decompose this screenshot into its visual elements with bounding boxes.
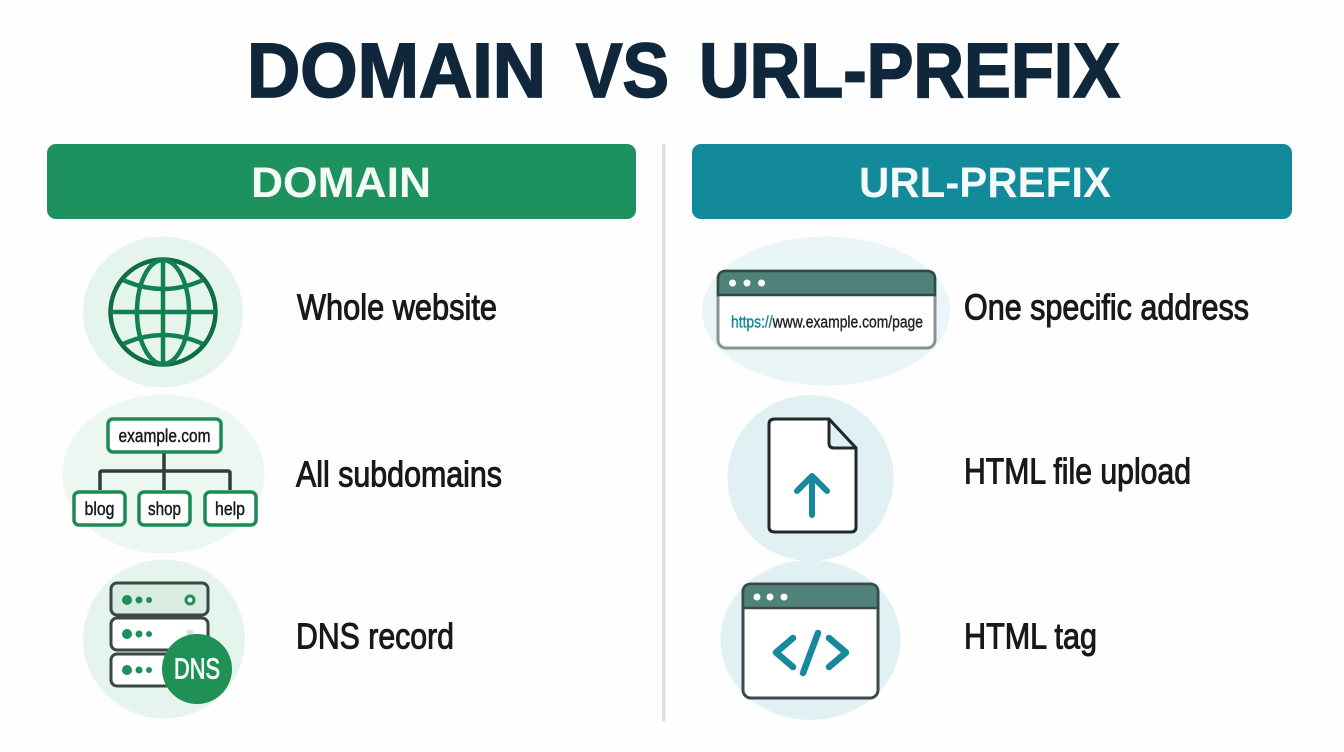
icon: globe [83,236,243,388]
label: one specific address: One specific address [964,286,1249,328]
url-prefix header: URL-PREFIX [859,159,1111,207]
label: whole website: Whole website [297,286,497,328]
icon: file upload [728,395,894,561]
panel: url-prefix [692,144,1292,720]
domain header [47,144,636,219]
icon: dns servers [83,560,245,718]
label: all subdomains: All subdomains [296,454,502,494]
title: VS [576,28,669,114]
icon: address bar [702,236,950,386]
icon: subdomain tree: example.com [118,426,210,446]
icon: subdomain tree: shop [148,498,181,519]
label: dns record: DNS record [296,616,454,656]
icon: subdomain tree: blog [84,498,114,519]
icon: subdomain tree: help [215,498,245,519]
icon: dns servers: DNS [174,654,220,686]
panel: domain [47,144,636,718]
label: html tag: HTML tag [964,616,1097,656]
title: URL-PREFIX [699,28,1120,114]
label: html file upload: HTML file upload [964,450,1191,492]
icon: html tag window [720,560,900,720]
url-prefix header [692,144,1292,219]
icon: address bar: https://www.example.com/page [731,312,923,332]
icon: subdomain tree [62,394,264,554]
domain header: DOMAIN [251,159,431,207]
title: DOMAIN [247,28,546,114]
